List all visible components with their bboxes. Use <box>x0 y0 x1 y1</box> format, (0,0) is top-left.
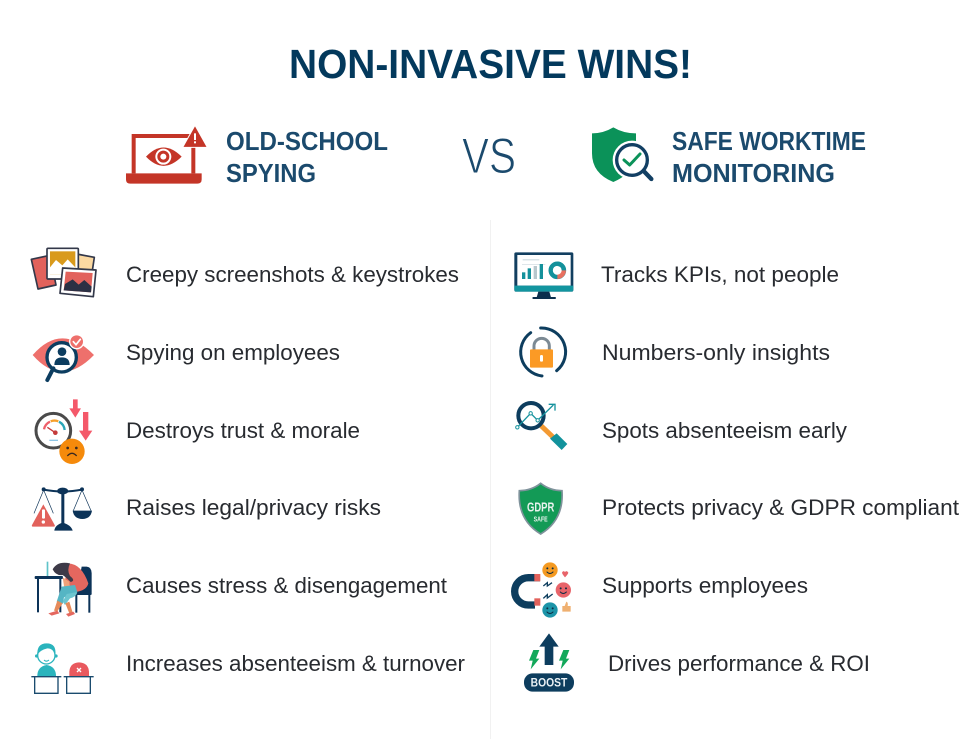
text: numbers-only insights: Numbers-only insights <box>602 340 830 365</box>
heading: old-school spying: SPYING <box>226 158 316 188</box>
icon: empty desk absence <box>31 643 94 693</box>
text: creepy screenshots: Creepy screenshots & keystrokes <box>126 262 459 287</box>
text: increases absenteeism: Increases absenteeism & turnover <box>126 651 465 676</box>
icon: eye with magnifier <box>33 335 94 380</box>
icon: GDPR shield: SAFE <box>534 514 548 523</box>
title: NON-INVASIVE WINS! <box>289 41 692 87</box>
heading: safe worktime monitoring <box>672 126 866 188</box>
icon: GDPR shield: GDPR <box>527 500 554 514</box>
text: tracks KPIs: Tracks KPIs, not people <box>601 262 839 287</box>
text: drives performance: Drives performance & ROI <box>608 651 870 676</box>
heading: old-school spying: OLD-SCHOOL <box>226 126 388 156</box>
icon: scales with warning <box>32 487 92 531</box>
text: protects privacy: Protects privacy & GDPR compliant <box>602 495 959 520</box>
icon: shield with magnifier check <box>592 127 651 182</box>
icon: KPI monitor <box>514 252 573 299</box>
text: destroys trust: Destroys trust & morale <box>126 418 360 443</box>
icon: boost arrow <box>524 633 574 692</box>
icon: GDPR shield <box>519 483 562 534</box>
text: supports employees: Supports employees <box>602 573 808 598</box>
heading: old-school spying <box>226 126 388 188</box>
heading: safe worktime monitoring: SAFE WORKTIME <box>672 126 866 156</box>
vs label: VS <box>462 128 516 184</box>
icon: boost arrow: BOOST <box>531 676 568 690</box>
heading: safe worktime monitoring: MONITORING <box>672 158 835 188</box>
icon: gauge with sad face <box>36 399 92 464</box>
text: raises legal risks: Raises legal/privacy risks <box>126 495 381 520</box>
panel: old-school list <box>31 248 465 693</box>
text: spots absenteeism: Spots absenteeism early <box>602 418 847 443</box>
icon: exhausted worker at desk <box>35 562 92 617</box>
icon: magnet attracting smiles <box>515 562 571 618</box>
text: spying on employees: Spying on employees <box>126 340 340 365</box>
text: causes stress: Causes stress & disengagement <box>126 573 447 598</box>
icon: magnifier with trend <box>516 403 567 450</box>
panel: safe monitoring list <box>514 252 959 692</box>
icon: padlock in ring <box>521 328 566 376</box>
icon: photos <box>31 248 96 297</box>
icon: laptop with eye and warning <box>126 125 207 184</box>
